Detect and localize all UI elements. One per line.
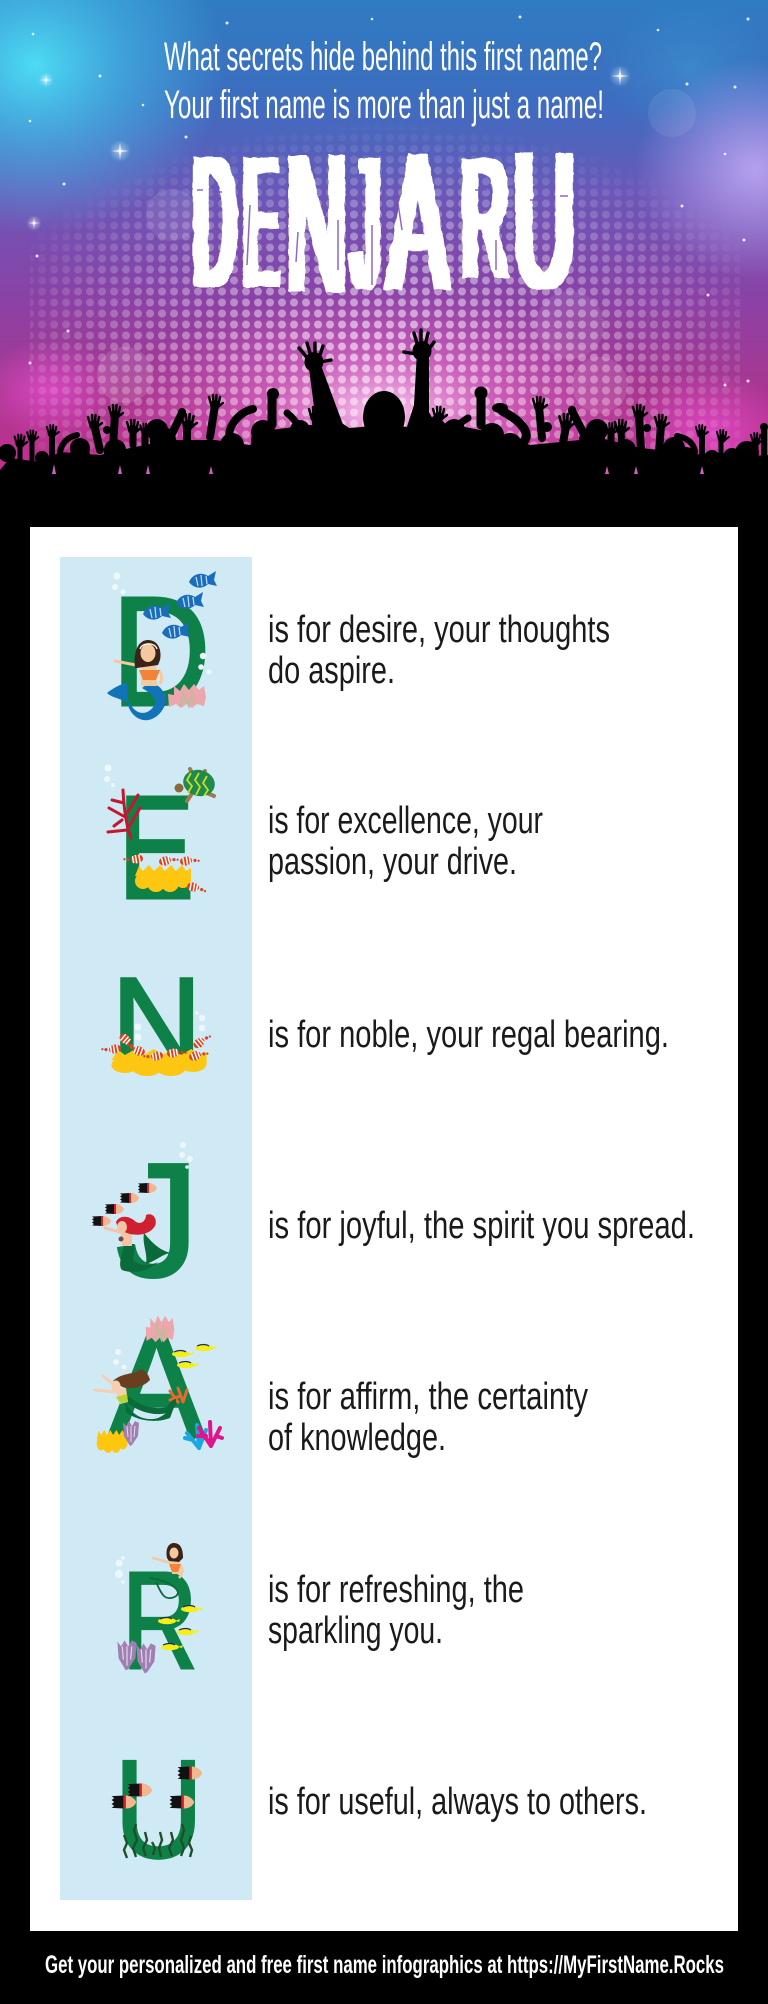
right side of crowd [439, 398, 764, 470]
panel: white content card [30, 527, 738, 1931]
text: E: passion, your drive. [268, 841, 517, 883]
title: name: A [388, 114, 448, 331]
text: A: of knowledge. [268, 1417, 446, 1459]
letter U illustration: U [114, 1731, 203, 1887]
letter J illustration: J [116, 1129, 199, 1310]
letter N illustration: N [112, 953, 202, 1092]
text: R [268, 1569, 524, 1652]
letter R illustration: R [122, 1543, 198, 1697]
title: name [194, 112, 575, 333]
letter E illustration [104, 764, 218, 929]
title: name: R [462, 123, 508, 314]
text: A: is for affirm, the certainty [268, 1376, 588, 1418]
panel: light blue letter column [60, 557, 252, 1900]
text: E: is for excellence, your [268, 800, 543, 842]
left side of crowd [20, 398, 317, 470]
hero background: concert stage lights [0, 0, 768, 470]
letter D illustration: D [111, 565, 211, 739]
letter E illustration: E [118, 765, 194, 929]
title: name: U [513, 112, 575, 328]
text: A [268, 1376, 588, 1459]
text: D: do aspire. [268, 650, 395, 692]
central figure with raised hands [299, 330, 470, 450]
text: E [268, 800, 543, 883]
text: D: is for desire, your thoughts [268, 609, 610, 651]
text: R: sparkling you. [268, 1610, 443, 1652]
title: name: E [244, 118, 278, 326]
text: D [268, 609, 610, 692]
title: name: N [287, 114, 347, 333]
letter A illustration: A [108, 1299, 205, 1470]
title: name: D [194, 119, 236, 326]
text: U: is for useful, always to others. [268, 1781, 647, 1823]
text: R: is for refreshing, the [268, 1569, 524, 1611]
heading: tagline [164, 35, 604, 127]
crowd silhouette [0, 330, 768, 527]
title: name: J [352, 120, 379, 328]
